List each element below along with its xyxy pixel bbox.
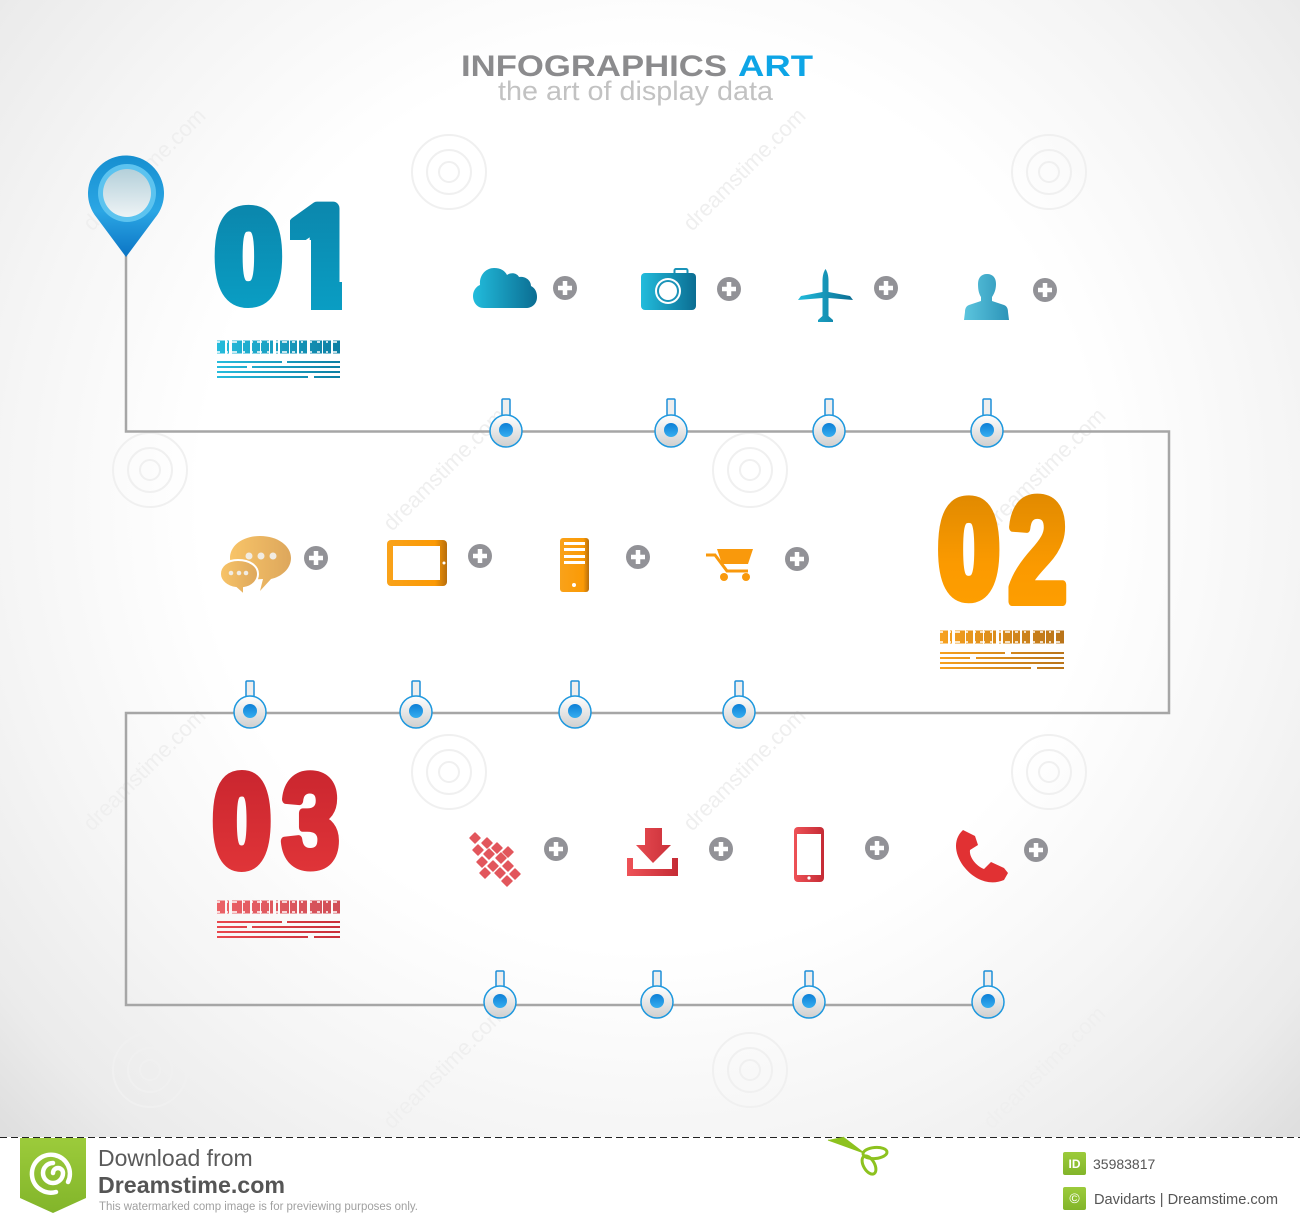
number 02 [939, 468, 1067, 634]
panel: step 02 [220, 468, 1067, 728]
icon: server [560, 538, 589, 592]
panel: step 01 [216, 178, 1057, 447]
watermarks: dreamstime.com [978, 403, 1111, 536]
icon: plus buttons [544, 836, 1048, 862]
panel: step 03 [214, 748, 1048, 1018]
image credit: © [1069, 1190, 1080, 1206]
heading accent: ART [738, 50, 813, 83]
footer [0, 1137, 1300, 1226]
icon: download [627, 828, 678, 876]
icon: chat bubbles [220, 536, 291, 595]
number 01 [214, 202, 342, 310]
image id: 35983817 [1093, 1156, 1156, 1172]
watermarks: dreamstime.com [378, 1001, 511, 1134]
icon: person [964, 274, 1009, 320]
watermarks: dreamstime.com [78, 103, 211, 236]
icon: smartphone [794, 827, 824, 882]
icon: cloud [473, 268, 537, 308]
placeholder text block [217, 902, 340, 938]
number 02: 0 [939, 474, 999, 624]
timeline path [126, 255, 1169, 1005]
image credit: Davidarts | Dreamstime.com [1094, 1192, 1278, 1208]
placeholder text block [217, 342, 340, 378]
icon: pixel dots [470, 833, 520, 886]
watermarks: dreamstime.com [678, 703, 811, 836]
watermarks: dreamstime.com [378, 403, 511, 536]
number 03: 0 [214, 752, 270, 891]
download text: Dreamstime.com [98, 1172, 285, 1198]
watermarks: dreamstime.com [978, 1001, 1111, 1134]
placeholder text block [940, 632, 1064, 669]
download text: This watermarked comp image is for previewing purposes only. [99, 1201, 418, 1213]
timeline markers row 3 [484, 971, 1004, 1018]
number 01: 1 [287, 178, 356, 332]
download text [98, 1145, 418, 1213]
heading: INFOGRAPHICS [461, 50, 727, 83]
watermarks [78, 103, 1111, 1134]
timeline markers row 2 [234, 681, 755, 728]
number 03: 3 [282, 748, 339, 893]
image credit [1063, 1187, 1278, 1210]
timeline markers row 1 [490, 399, 1003, 447]
watermarks: dreamstime.com [678, 103, 811, 236]
icon: location pin [88, 155, 164, 257]
number 02: 2 [1008, 468, 1067, 634]
icon: green badge [20, 1138, 86, 1213]
icon: tablet [387, 540, 447, 586]
icon: shopping cart [706, 549, 753, 581]
watermarks: dreamstime.com [78, 703, 211, 836]
number 01: 0 [216, 186, 281, 328]
icon: plus buttons [304, 544, 809, 571]
image id: ID [1068, 1157, 1081, 1171]
number 03 [214, 748, 339, 893]
icon: plus buttons [553, 276, 1057, 302]
icon: scissors [828, 1137, 887, 1176]
icon: camera [641, 269, 696, 310]
title [461, 50, 813, 106]
icon: airplane [798, 269, 853, 322]
subtitle: the art of display data [498, 76, 774, 106]
image id [1063, 1152, 1156, 1175]
icon: telephone handset [956, 830, 1008, 882]
download text: Download from [98, 1145, 253, 1171]
